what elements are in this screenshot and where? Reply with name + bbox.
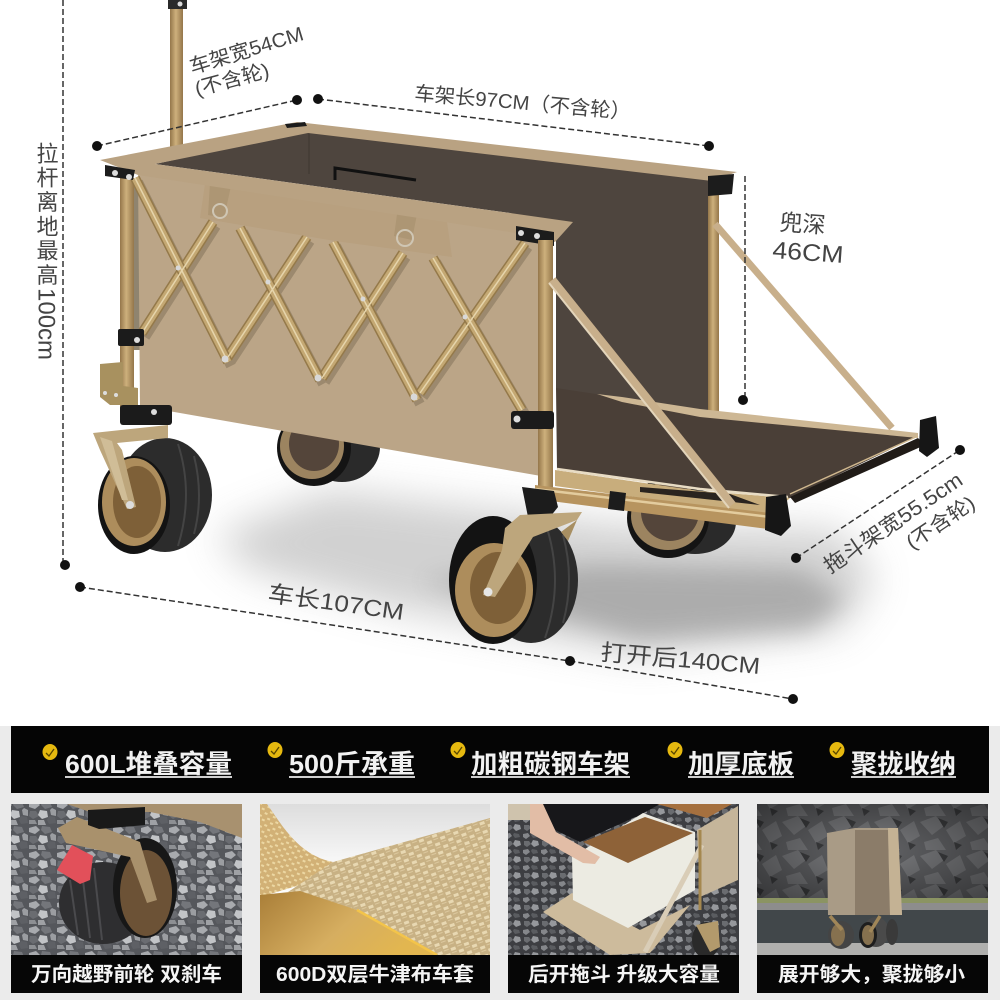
feature: 500 jin load: 500斤承重 <box>289 749 415 779</box>
rear wheel left <box>277 410 380 486</box>
photo card: oxford fabric: 600D双层牛津布车套 <box>276 962 474 986</box>
front left wheel <box>93 425 212 554</box>
dimension: frame width <box>92 22 306 151</box>
feature: 600L stacking capacity: 600L堆叠容量 <box>65 749 232 779</box>
dimension: tailgate width <box>791 445 979 578</box>
top rim <box>100 122 737 242</box>
handle <box>168 0 187 148</box>
dimension: pull rod height <box>32 0 70 570</box>
front right wheel <box>449 512 582 644</box>
dimension: frame length: 车架长97CM（不含轮） <box>414 82 632 124</box>
tailgate frame bar <box>522 416 939 536</box>
dimension: wagon length: 打开后140CM <box>600 639 761 679</box>
dimension: bed depth: 兜深 <box>779 209 826 238</box>
photo card: rear opening with storage box: 后开拖斗 升级大容量 <box>528 962 720 986</box>
photo card: front wheel: 万向越野前轮 双刹车 <box>31 962 222 986</box>
scissor frame <box>135 178 528 414</box>
dimension: tailgate width: 拖斗架宽55.5cm <box>820 468 967 578</box>
dimension: wagon length: 车长107CM <box>266 580 406 625</box>
feature bar <box>11 726 989 793</box>
feature: thick floor <box>668 742 794 779</box>
rim corner brackets <box>105 122 734 246</box>
dimension: frame width: (不含轮) <box>192 59 272 101</box>
photo card: oxford fabric <box>260 804 490 993</box>
dimension: tailgate width: (不含轮) <box>902 491 979 554</box>
ground shadow <box>215 490 875 655</box>
feature: 500 jin load <box>268 742 415 779</box>
photo card: front wheel <box>11 804 242 993</box>
feature: reinforced steel frame: 加粗碳钢车架 <box>471 749 630 779</box>
photo card: rear opening with storage box <box>508 804 739 993</box>
rear post and left post <box>120 178 719 412</box>
tailgate straps <box>549 224 892 508</box>
dimension: frame width: 车架宽54CM <box>187 22 306 79</box>
side panel flap with straps and D rings <box>155 165 452 257</box>
dimension: bed depth <box>738 176 844 405</box>
feature: folding storage <box>830 742 956 779</box>
wagon interior <box>155 131 712 412</box>
feature: thick floor: 加厚底板 <box>688 749 794 779</box>
side panel <box>138 172 545 476</box>
rear wheel right <box>627 478 736 558</box>
dimension: pull rod height: 拉杆离地最高 100cm <box>32 142 60 360</box>
front post and brackets <box>100 240 554 488</box>
tailgate floor <box>555 388 925 516</box>
interior corner line and handle slot <box>309 133 416 180</box>
photo card: folded wagon: 展开够大，聚拢够小 <box>778 963 965 986</box>
dimension: wagon length <box>75 580 798 704</box>
feature: folding storage: 聚拢收纳 <box>851 749 956 779</box>
photo card: folded wagon <box>757 804 988 993</box>
dimension: frame length <box>313 82 714 151</box>
dimension: bed depth: 46CM <box>772 237 844 269</box>
